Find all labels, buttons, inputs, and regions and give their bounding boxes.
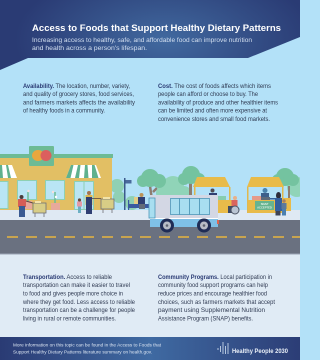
text block: community programs: choices, such as farmers markets that accept (158, 299, 275, 306)
person with cart left (18, 195, 33, 217)
trees (110, 166, 307, 210)
bus door (149, 198, 155, 218)
bus wheels (160, 218, 211, 232)
bus windows (170, 198, 210, 214)
text block: transportation: Transportation. Access to reliable (23, 274, 112, 281)
text block: cost: Cost. The cost of foods affects which items (158, 83, 271, 90)
text block: cost: people can afford or choose to buy. The (158, 91, 258, 98)
sidewalk (0, 210, 300, 220)
text block: community programs: reduce prices and encourage healthier food (158, 290, 267, 298)
parent and child at stall (270, 192, 286, 216)
subtitle: Increasing access to healthy, safe, and affordable food can improve nutrition (32, 37, 253, 44)
text block: cost: convenience stores and small food markets. (158, 116, 270, 123)
bench with person (128, 193, 152, 210)
lower panel (0, 254, 300, 338)
subtitle (32, 37, 253, 52)
text block: transportation: where they get food. Less access to reliable (22, 299, 135, 306)
text block: transportation: to food and gives people more choice in (23, 290, 123, 298)
title: Access to Foods that Support Healthy Dietary Patterns (32, 22, 281, 33)
text block: cost: can be limited and often more expensive at (158, 108, 267, 115)
person in wheelchair (228, 196, 239, 214)
adult and child (77, 191, 101, 214)
shopping cart left (33, 201, 46, 217)
footer text: More information on this topic can be found in the Access to Foods that (13, 343, 162, 349)
header banner (0, 0, 300, 70)
text block: cost: availability of produce and other healthier items (158, 100, 278, 106)
windows (0, 180, 94, 210)
text block: availability: and farmers markets affects the availability (23, 100, 136, 106)
grocery store (0, 146, 113, 210)
subtitle: and health across a person's lifespan. (32, 45, 147, 52)
store sign (29, 146, 54, 166)
logo: Healthy People 2030: Healthy People 2030 (232, 348, 288, 355)
text block: transportation: transportation can be a challenge for people (23, 307, 135, 314)
road (0, 220, 303, 254)
footer text: Support Healthy Dietary Patterns literature summary on health.gov. (13, 350, 152, 356)
text block: availability: and quality of grocery stores, food services, (23, 91, 134, 98)
text block: community programs (158, 274, 275, 322)
shopping cart right (101, 197, 114, 213)
sign: snap accepted: SNAP (261, 202, 268, 206)
footer text (13, 343, 162, 356)
awnings (0, 165, 101, 178)
text block: transportation: living in rural or remote communities. (23, 315, 116, 322)
text block: community programs: community food support programs can help (158, 282, 268, 289)
lane markings (7, 236, 303, 238)
sky background (0, 0, 300, 254)
shoppers with carts (18, 191, 114, 217)
text block: transportation (22, 274, 135, 322)
text block: transportation: transportation can make it easier to travel (23, 282, 130, 289)
text block: community programs: Assistance Program (SNAP) benefits. (158, 315, 253, 322)
bus stop sign (124, 178, 132, 210)
market stall left (193, 177, 237, 213)
text block: community programs: payment using Supplemental Nutrition (158, 307, 265, 314)
sign: snap accepted (255, 201, 274, 210)
flower pots (24, 190, 60, 210)
logo: Healthy People 2030 (218, 342, 288, 355)
bus (149, 195, 219, 232)
text block: cost (158, 83, 278, 123)
sign: snap accepted: ACCEPTED (257, 206, 272, 210)
text block: availability: of healthy foods in a community. (23, 108, 105, 115)
text block: availability (23, 83, 136, 115)
footer (0, 337, 300, 360)
market stall right (247, 177, 291, 213)
text block: community programs: Community Programs. Local participation in (158, 274, 272, 281)
text block: availability: Availability. The location, number, variety, (23, 83, 130, 90)
